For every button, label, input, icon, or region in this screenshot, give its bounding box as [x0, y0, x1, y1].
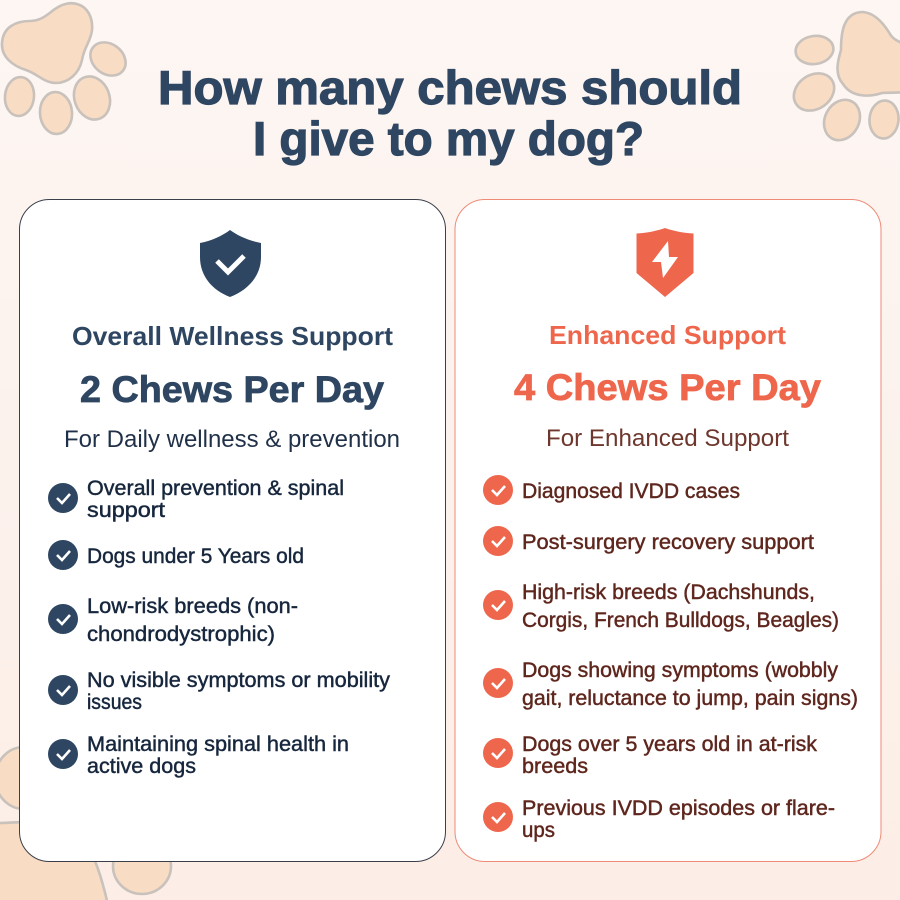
- list item: no visible symptoms: [48, 669, 391, 714]
- list item: post-surgery: [483, 526, 814, 556]
- list item: dogs over 5: breeds: [522, 755, 588, 778]
- icon: paw print top right: [787, 12, 900, 147]
- title: How many chews should: [158, 61, 742, 114]
- list item: high-risk breeds: [483, 581, 839, 632]
- list item: maintaining spinal health: Maintaining spinal health in: [87, 733, 349, 756]
- icon: paw print bottom left: [0, 747, 171, 900]
- panel: overall wellness support: [20, 200, 446, 862]
- subheading: for enhanced support: For Enhanced Support: [546, 425, 789, 452]
- list item: no visible symptoms: No visible symptoms or mobility: [87, 669, 391, 692]
- list item: low-risk breeds: chondrodystrophic): [87, 623, 275, 646]
- list item: diagnosed ivdd: [483, 475, 740, 505]
- list item: maintaining spinal health: [48, 733, 349, 778]
- list item: dogs showing symptoms: gait, reluctance to jump, pain signs): [522, 687, 858, 710]
- list item: overall prevention: [48, 477, 344, 522]
- list item: previous ivdd episodes: ups: [522, 819, 555, 842]
- heading: overall wellness support: Overall Wellness Support: [72, 321, 393, 351]
- icon: paw print top left: [2, 3, 132, 135]
- list item: previous ivdd episodes: [483, 797, 835, 842]
- list item: dogs over 5: [483, 733, 818, 778]
- icon: navy shield with check: [200, 230, 261, 297]
- list item: no visible symptoms: issues: [87, 691, 142, 714]
- list item: high-risk breeds: Corgis, French Bulldogs, Beagles): [522, 609, 839, 632]
- list item: dogs under 5: Dogs under 5 Years old: [87, 545, 304, 568]
- list item: high-risk breeds: High-risk breeds (Dachshunds,: [522, 581, 815, 604]
- title: [158, 61, 742, 165]
- list item: previous ivdd episodes: Previous IVDD episodes or flare-: [522, 797, 835, 820]
- list item: diagnosed ivdd: Diagnosed IVDD cases: [522, 480, 740, 503]
- heading: 4 chews per day: 4 Chews Per Day: [514, 367, 821, 408]
- list item: maintaining spinal health: active dogs: [87, 755, 196, 778]
- title: I give to my dog?: [253, 112, 644, 165]
- list item: overall prevention: Overall prevention & spinal: [87, 477, 344, 500]
- heading: enhanced support: Enhanced Support: [549, 320, 786, 350]
- list item: dogs over 5: Dogs over 5 years old in at-risk: [522, 733, 818, 756]
- list item: dogs showing symptoms: [483, 659, 858, 710]
- panel: enhanced support: [455, 200, 881, 862]
- list item: dogs under 5: [48, 540, 304, 570]
- list item: dogs showing symptoms: Dogs showing symptoms (wobbly: [522, 659, 838, 682]
- heading: 2 chews per day: 2 Chews Per Day: [80, 369, 384, 410]
- list item: low-risk breeds: [48, 595, 298, 646]
- icon: coral shield with bolt: [636, 228, 694, 297]
- list item: low-risk breeds: Low-risk breeds (non-: [87, 595, 298, 618]
- list item: overall prevention: support: [87, 499, 165, 522]
- list item: post-surgery: Post-surgery recovery support: [522, 531, 814, 554]
- subheading: for daily wellness and prevention: For Daily wellness & prevention: [64, 426, 400, 453]
